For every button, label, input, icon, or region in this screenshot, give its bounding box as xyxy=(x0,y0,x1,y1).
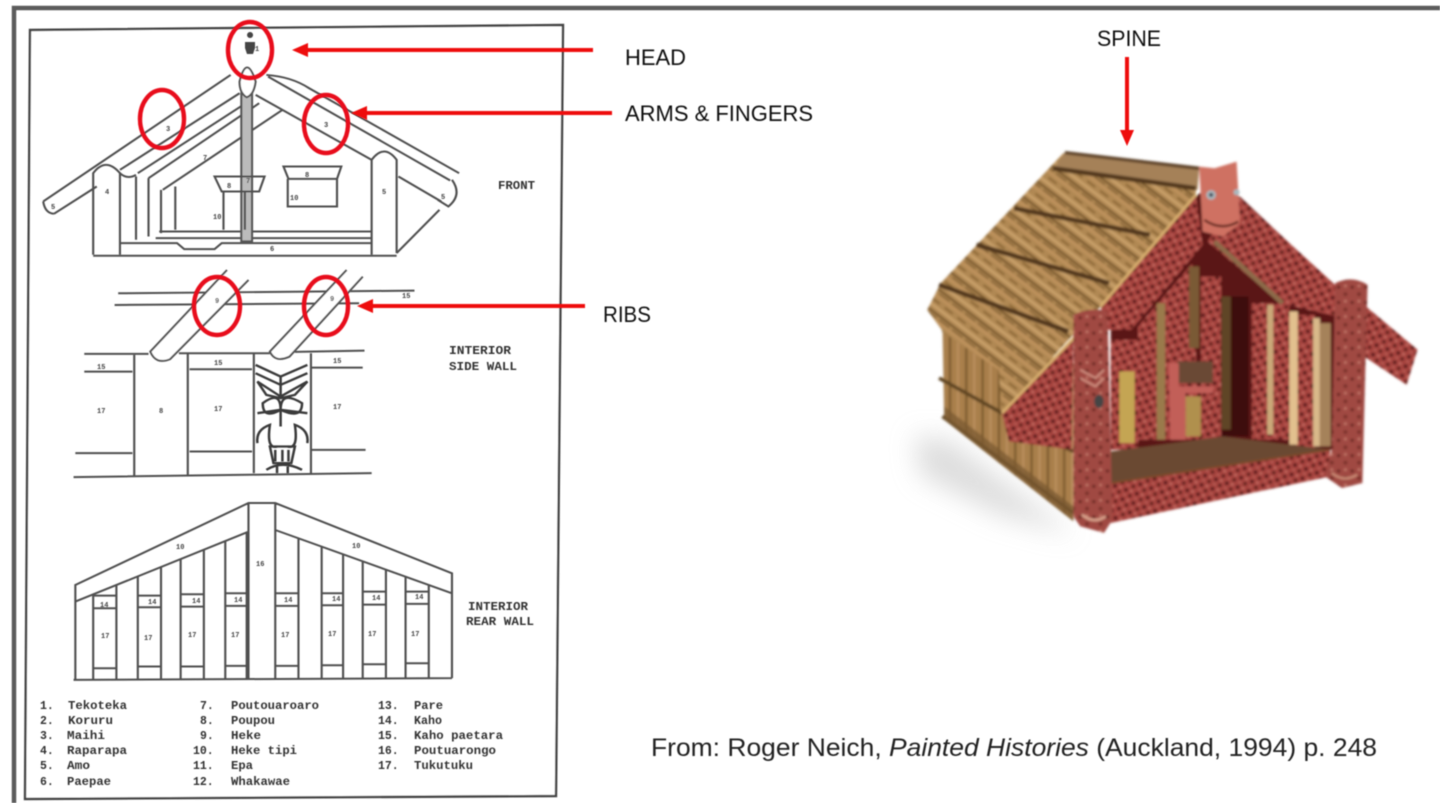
legend: numbered parts: Kaho paetara xyxy=(414,730,503,743)
diagram: interior side wall: 15 xyxy=(333,358,341,366)
diagram: interior rear wall: 14 xyxy=(192,598,200,606)
interior xyxy=(1138,263,1199,440)
diagram: front view: 8 xyxy=(305,172,309,180)
diagram: interior rear wall: 14 xyxy=(234,597,242,605)
diagram: front view: 10 xyxy=(290,195,298,203)
diagram: interior rear wall: 14 xyxy=(284,597,292,605)
label: spine: SPINE xyxy=(1097,26,1161,51)
diagram: interior rear wall: 17 xyxy=(328,631,336,639)
left post xyxy=(1073,310,1112,533)
legend: numbered parts: Kaho xyxy=(414,715,442,728)
diagram: interior side wall: 15 xyxy=(97,364,105,372)
diagram: front view: 3 xyxy=(166,126,170,134)
ridge and battens xyxy=(1053,153,1199,190)
diagram: interior side wall: 15 xyxy=(214,360,222,368)
legend: numbered parts: 6. xyxy=(40,776,54,789)
interior posts and panels xyxy=(1119,371,1135,443)
ground shadow xyxy=(915,435,1075,535)
legend: numbered parts: 2. xyxy=(40,715,54,728)
legend: numbered parts: 14. xyxy=(378,715,399,728)
diagram: interior rear wall: 14 xyxy=(148,599,156,607)
diagram: interior rear wall: 10 xyxy=(352,543,360,551)
diagram: interior side wall: 15 xyxy=(402,293,410,301)
legend: numbered parts: Heke xyxy=(231,730,261,743)
legend: numbered parts: 15. xyxy=(378,730,399,743)
arrow: spine xyxy=(1120,57,1134,146)
legend: numbered parts: Amo xyxy=(67,760,90,773)
diagram: front view: 5 xyxy=(51,204,55,212)
label: arms and fingers: ARMS & FINGERS xyxy=(625,101,813,126)
diagram: interior side wall: 17 xyxy=(214,406,222,414)
label: head: HEAD xyxy=(625,45,686,70)
legend: numbered parts: 4. xyxy=(40,745,54,758)
arrow: head xyxy=(292,43,593,57)
diagram: interior rear wall: 16 xyxy=(256,561,264,569)
label: interior side wall: INTERIOR xyxy=(449,345,511,358)
diagram: interior rear wall: 17 xyxy=(368,631,376,639)
legend: numbered parts: 17. xyxy=(378,760,399,773)
label: interior rear wall: REAR WALL xyxy=(466,616,534,629)
diagram: interior rear wall: 14 xyxy=(332,596,340,604)
legend: numbered parts: 3. xyxy=(40,730,54,743)
diagram: front view xyxy=(43,32,459,256)
diagram: interior rear wall: 17 xyxy=(101,633,109,641)
label: interior rear wall: INTERIOR xyxy=(468,601,528,614)
legend: numbered parts: Poutouaroaro xyxy=(231,700,319,713)
legend: numbered parts: Maihi xyxy=(67,730,105,743)
legend: numbered parts: 16. xyxy=(378,745,399,758)
diagram: interior rear wall: 17 xyxy=(281,632,289,640)
legend: numbered parts: Heke tipi xyxy=(231,745,297,758)
diagram: interior rear wall: 14 xyxy=(415,594,423,602)
diagram: interior rear wall: 17 xyxy=(231,632,239,640)
backing behind gable xyxy=(1101,193,1335,450)
roof thatch xyxy=(927,153,1198,413)
diagram: interior rear wall: 10 xyxy=(176,544,184,552)
gable wall left xyxy=(1002,336,1073,450)
diagram: front view: 10 xyxy=(213,214,221,222)
diagram: interior side wall: 8 xyxy=(159,408,163,416)
icon: koruru carved head xyxy=(1199,162,1240,237)
diagram: interior rear wall: 17 xyxy=(188,632,196,640)
label: interior side wall: SIDE WALL xyxy=(449,361,517,374)
legend: numbered parts: Poupou xyxy=(231,715,275,728)
right post xyxy=(1325,279,1368,488)
barge end right xyxy=(1364,305,1417,385)
diagram: front view: 7 xyxy=(246,178,250,186)
diagram: interior side wall: 9 xyxy=(330,296,334,304)
legend: numbered parts: Epa xyxy=(231,760,253,773)
icon: tekoteka figure xyxy=(245,32,255,54)
legend: numbered parts: 9. xyxy=(200,730,214,743)
legend: numbered parts: 7. xyxy=(200,700,214,713)
base board xyxy=(1111,450,1330,523)
legend: numbered parts: Raparapa xyxy=(67,745,127,758)
legend: numbered parts: 8. xyxy=(200,715,214,728)
diagram: front view: 3 xyxy=(324,122,328,130)
barge board left xyxy=(1101,195,1203,330)
diagram: interior side wall xyxy=(74,270,414,477)
label: ribs: RIBS xyxy=(603,302,651,327)
diagram: interior side wall: 9 xyxy=(215,298,219,306)
floor xyxy=(1111,436,1330,485)
barge board right xyxy=(1208,195,1337,316)
arrow: ribs xyxy=(357,299,585,313)
diagram: interior rear wall: 17 xyxy=(411,631,419,639)
legend: numbered parts: Poutuarongo xyxy=(414,745,496,758)
arrow: arms and fingers xyxy=(351,106,612,120)
legend: numbered parts: Koruru xyxy=(68,715,113,728)
panel: line drawing document xyxy=(25,25,563,799)
diagram: front view: 1 xyxy=(255,46,259,54)
label: front: FRONT xyxy=(498,179,535,193)
legend: numbered parts: Paepae xyxy=(67,776,111,789)
diagram: front view: 8 xyxy=(227,183,231,191)
legend: numbered parts: 11. xyxy=(193,760,214,773)
diagram: interior side wall: 17 xyxy=(333,404,341,412)
diagram: interior side wall: 17 xyxy=(97,408,105,416)
diagram: front view: 6 xyxy=(270,246,274,254)
legend: numbered parts xyxy=(40,700,503,789)
legend: numbered parts: Pare xyxy=(414,700,443,713)
photo: model meeting house xyxy=(915,153,1417,535)
legend: numbered parts: Tukutuku xyxy=(414,760,473,773)
callout circles: head, arms and ribs xyxy=(140,22,348,335)
diagram: front view: 7 xyxy=(203,155,207,163)
legend: numbered parts: 1. xyxy=(40,700,54,713)
diagram: interior rear wall xyxy=(74,503,452,680)
legend: numbered parts: Whakawae xyxy=(231,776,290,789)
diagram: interior rear wall: 14 xyxy=(372,595,380,603)
diagram: interior rear wall: 14 xyxy=(100,602,108,610)
diagram: front view: 5 xyxy=(382,189,386,197)
diagram: front view: 4 xyxy=(105,189,109,197)
legend: numbered parts: 13. xyxy=(378,700,399,713)
document frame xyxy=(25,25,563,799)
legend: numbered parts: 12. xyxy=(193,776,214,789)
legend: numbered parts: 10. xyxy=(193,745,214,758)
legend: numbered parts: 5. xyxy=(40,760,54,773)
diagram: interior rear wall: 17 xyxy=(144,635,152,643)
citation: From: Roger Neich, Painted Histories (Auckland, 1994) p. 248 xyxy=(651,734,1377,762)
side wall xyxy=(942,326,1073,521)
diagram: front view: 5 xyxy=(441,194,445,202)
legend: numbered parts: Tekoteka xyxy=(68,700,127,713)
